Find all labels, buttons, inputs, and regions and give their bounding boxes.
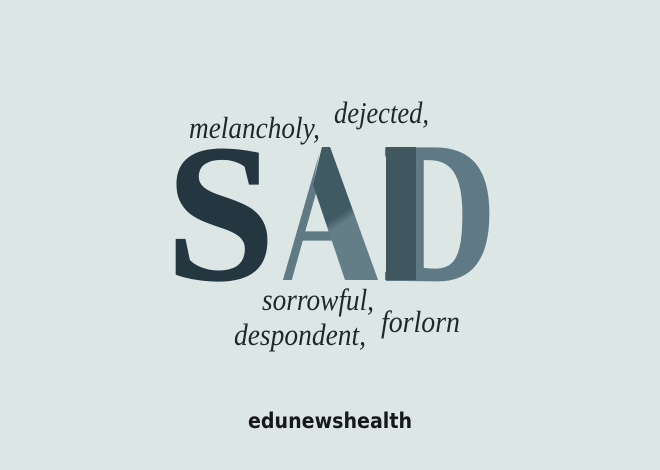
- word: melancholy: melancholy,: [189, 110, 320, 145]
- word cluster: bottom synonyms: [234, 282, 460, 352]
- word: forlorn: forlorn: [381, 304, 460, 339]
- letter S: S: [166, 105, 275, 322]
- word: dejected: dejected,: [334, 95, 429, 130]
- infographic canvas: [176, 102, 490, 428]
- letter A: A: [265, 99, 397, 334]
- brand name: edunewshealth: [248, 409, 412, 433]
- letter A: A: [269, 102, 389, 333]
- letter D: D: [383, 100, 496, 323]
- word: sorrowful: sorrowful,: [262, 282, 374, 317]
- letter A: [282, 147, 378, 280]
- mask below baseline: [272, 280, 386, 292]
- title: SAD: [176, 147, 490, 282]
- word: despondent: despondent,: [234, 317, 366, 352]
- D stem overlay: [386, 147, 416, 280]
- word cluster: top synonyms: [189, 95, 429, 145]
